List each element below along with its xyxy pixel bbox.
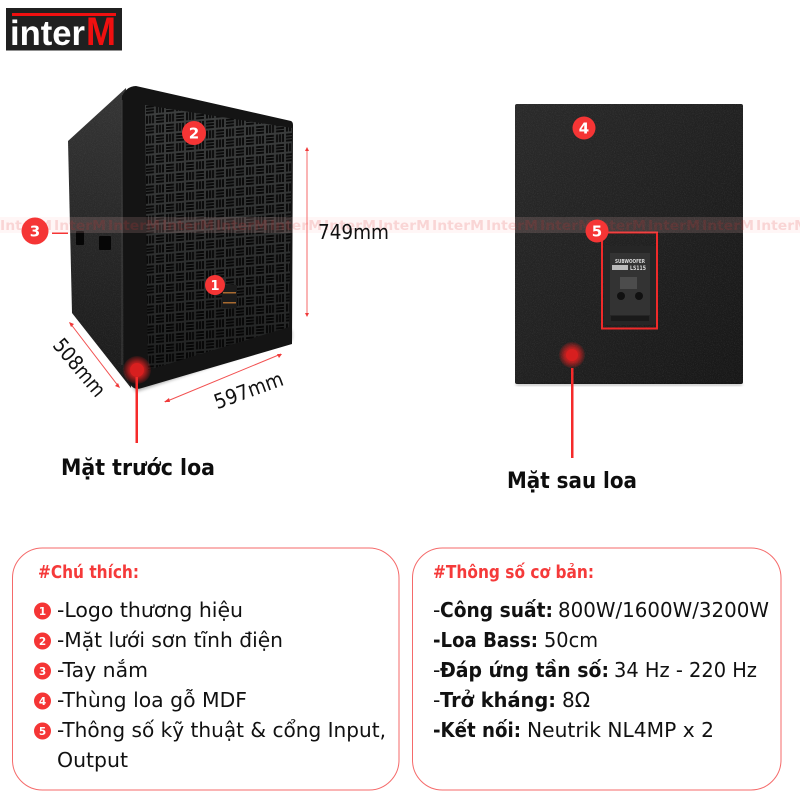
marker: Mặt trước loa: Mặt trước loa — [61, 455, 215, 481]
badge 4 — [572, 116, 596, 140]
item 5: 5 — [39, 726, 46, 738]
spec: công suất: Công suất: — [440, 598, 553, 622]
item 4: -Thùng loa gỗ MDF — [57, 687, 247, 712]
handle slots — [76, 231, 111, 250]
cabinet front frame — [122, 86, 293, 389]
watermark band: InterM — [324, 219, 376, 234]
dimension: height 749mm: 749mm — [318, 220, 389, 244]
connector plate: LS115 — [630, 265, 646, 272]
watermark band: InterM — [162, 219, 214, 234]
item 3: 3 — [39, 666, 46, 678]
item 5: Output — [57, 748, 128, 772]
item 1: 1 — [39, 606, 46, 618]
marker: Mặt sau loa: Mặt sau loa — [507, 468, 637, 494]
badge 1 — [205, 275, 225, 295]
watermark band: InterM — [0, 219, 52, 234]
watermark band: InterM — [432, 219, 484, 234]
item 3: -Tay nắm — [57, 658, 148, 682]
watermark band: InterM — [54, 219, 106, 234]
badge 5 — [586, 220, 608, 242]
spec: loa bass: 50cm — [544, 628, 598, 652]
watermark band: InterM — [486, 219, 538, 234]
dimension: depth 508mm: 508mm — [48, 333, 111, 402]
badge 1: 1 — [210, 279, 220, 294]
connector plate: SUBWOOFER — [615, 259, 646, 265]
spec: kết nối: -Kết nối: — [433, 718, 521, 742]
panel: chú thích — [12, 548, 399, 790]
badge 2 — [182, 121, 206, 145]
logo: InterM — [6, 8, 122, 54]
spec: trở kháng: Trở kháng: — [440, 688, 556, 712]
spec: trở kháng: - — [433, 688, 440, 712]
badge 4: 4 — [579, 120, 589, 138]
item 5 — [34, 718, 386, 772]
item 1: -Logo thương hiệu — [57, 598, 243, 622]
grille — [145, 105, 292, 370]
watermark band: InterM — [270, 219, 322, 234]
callout box — [602, 232, 657, 328]
speaker: front view — [68, 86, 293, 392]
panel: thông số cơ bản — [412, 548, 781, 790]
watermark band — [0, 217, 800, 234]
watermark band: InterM — [594, 219, 646, 234]
badge 3 with leader — [22, 218, 68, 244]
item 4: 4 — [39, 696, 46, 708]
badge 5: 5 — [592, 222, 602, 240]
watermark band: InterM — [108, 219, 160, 234]
marker: Mặt trước loa — [61, 356, 215, 481]
watermark band: InterM — [540, 219, 592, 234]
badge 2: 2 — [189, 124, 199, 142]
item 5: -Thông số kỹ thuật & cổng Input, — [57, 718, 386, 742]
dimension: height 749mm — [305, 147, 389, 317]
spec: đáp ứng tần số: - — [433, 658, 440, 682]
marker: Mặt sau loa — [507, 342, 637, 494]
spec: kết nối — [433, 718, 714, 742]
watermark band: InterM — [702, 219, 754, 234]
watermark band: InterM — [216, 219, 268, 234]
watermark band: InterM — [648, 219, 700, 234]
connector plate — [604, 246, 656, 325]
spec: công suất: 800W/1600W/3200W — [558, 598, 769, 622]
spec: đáp ứng tần số: Đáp ứng tần số: — [440, 658, 609, 682]
item 2: 2 — [39, 636, 46, 648]
heading: #Thông số cơ bản: — [433, 562, 594, 583]
cabinet shadow — [80, 316, 292, 392]
logo: InterM: M — [86, 10, 116, 54]
item 2: -Mặt lưới sơn tĩnh điện — [57, 628, 283, 652]
speaker: back view — [515, 104, 743, 386]
spec: đáp ứng tần số: 34 Hz - 220 Hz — [614, 658, 757, 682]
cabinet side panel — [68, 88, 131, 388]
dimension: width 597mm — [164, 354, 287, 414]
spec: công suất — [433, 598, 769, 622]
dimension: width 597mm: 597mm — [211, 367, 287, 414]
badge 3 with leader: 3 — [30, 222, 40, 240]
spec: công suất: - — [433, 598, 440, 622]
logo: InterM: inter — [10, 14, 85, 53]
spec: loa bass: -Loa Bass: — [433, 628, 538, 652]
spec: trở kháng: 8Ω — [562, 688, 590, 712]
heading: #Chú thích: — [38, 563, 139, 583]
spec: đáp ứng tần số — [433, 658, 757, 682]
brand badge — [222, 285, 237, 308]
spec: kết nối: Neutrik NL4MP x 2 — [527, 718, 714, 742]
watermark band: InterM — [378, 219, 430, 234]
